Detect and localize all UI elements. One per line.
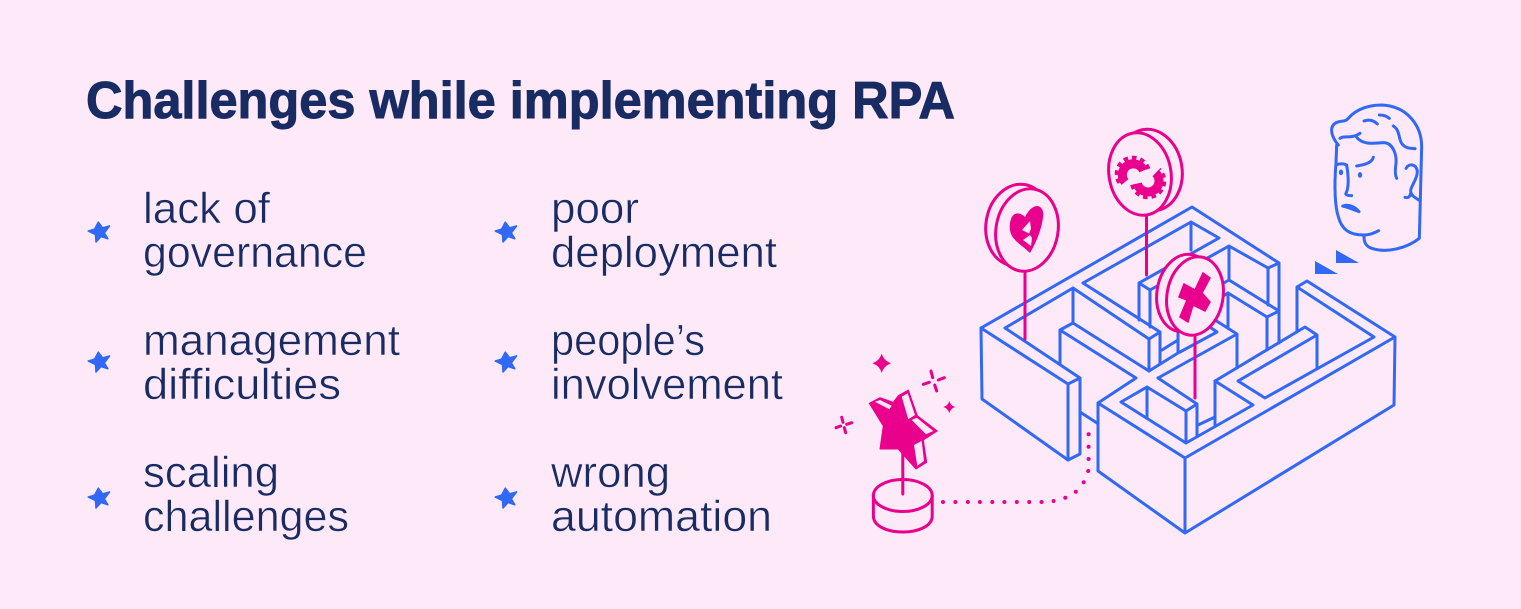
list item: lack of governance — [88, 184, 367, 277]
icon: star on pedestal — [869, 390, 937, 532]
icon: direction arrows — [1315, 250, 1359, 274]
icon: sparkles — [836, 354, 955, 433]
list item: people's involvement: involvement — [551, 360, 783, 409]
list item: wrong automation: wrong — [550, 448, 670, 497]
icon: heart pin — [979, 179, 1065, 339]
list item: scaling challenges: scaling — [143, 448, 279, 497]
list item: people's involvement — [495, 316, 783, 409]
list item: lack of governance: governance — [143, 228, 367, 277]
icon: gear pin — [1102, 124, 1189, 275]
list item: management difficulties: difficulties — [143, 360, 341, 409]
list item: poor deployment: deployment — [551, 228, 777, 277]
list item: wrong automation — [495, 448, 772, 541]
icon: cross pin — [1151, 250, 1229, 398]
list item: people's involvement: people’s — [551, 316, 705, 365]
dotted path — [941, 432, 1091, 504]
icon: worried face — [1332, 105, 1422, 250]
list item: wrong automation: automation — [551, 492, 772, 541]
list item: management difficulties: management — [143, 316, 400, 365]
maze illustration — [981, 207, 1395, 533]
list item: poor deployment — [495, 184, 777, 277]
list item: poor deployment: poor — [551, 184, 639, 233]
list item: lack of governance: lack of — [143, 184, 271, 233]
list item: scaling challenges — [88, 448, 349, 541]
title: Challenges while implementing RPA — [86, 72, 955, 130]
list item: management difficulties — [88, 316, 400, 409]
list item: scaling challenges: challenges — [143, 492, 349, 541]
